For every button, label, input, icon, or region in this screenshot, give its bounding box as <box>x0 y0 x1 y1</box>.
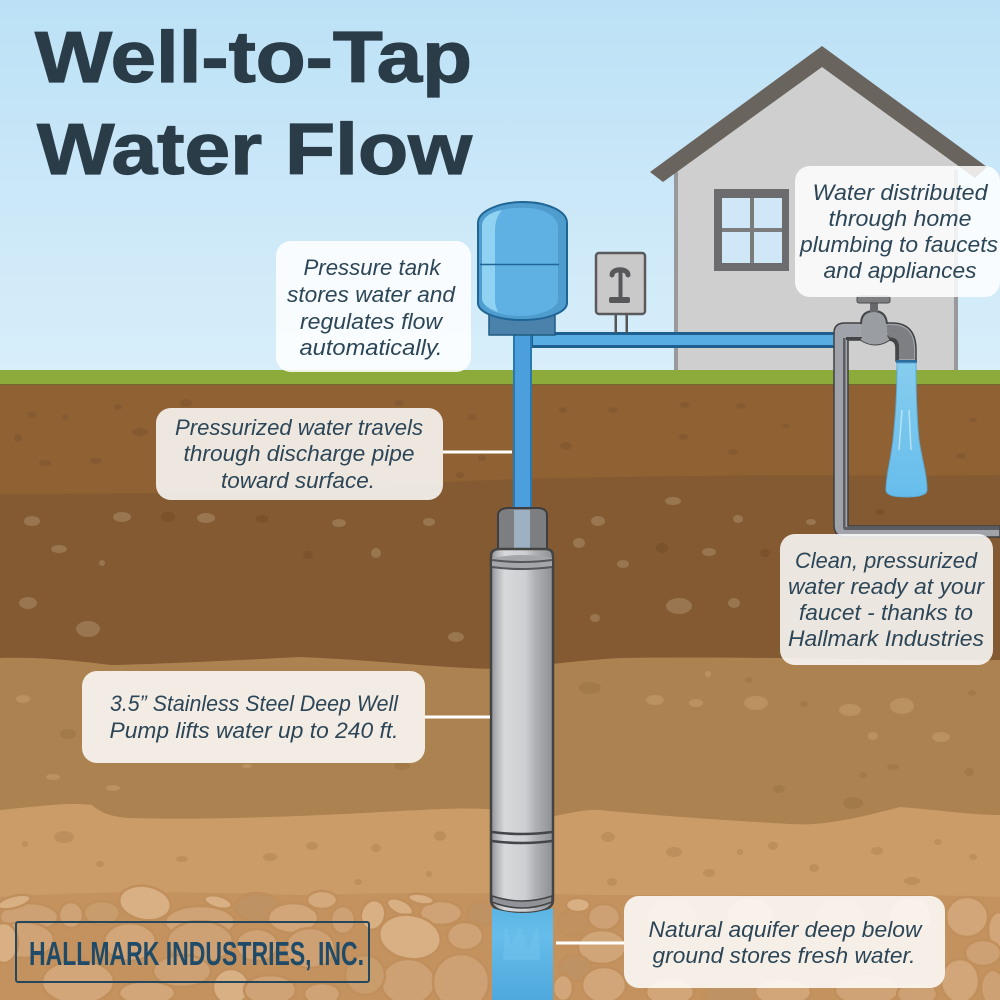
callout: clean water: Hallmark Industries <box>788 626 984 651</box>
house <box>650 46 987 370</box>
callout: home plumbing <box>795 166 1000 297</box>
callout: aquifer <box>624 896 945 988</box>
callout: discharge pipe: Pressurized water travels <box>175 415 423 440</box>
well casing connector <box>498 508 547 553</box>
sky <box>0 0 1000 372</box>
callout: clean water <box>780 534 993 665</box>
callout: aquifer: Natural aquifer deep below <box>648 917 923 942</box>
soil speckles: second layer <box>19 497 885 642</box>
callout: pressure tank: automatically. <box>300 335 442 360</box>
callout: discharge pipe <box>156 408 443 500</box>
callout: home plumbing: plumbing to faucets <box>799 232 998 257</box>
callout: pressure tank: regulates flow <box>300 309 444 334</box>
ground layers <box>0 370 1000 1000</box>
stainless pump <box>491 549 553 913</box>
callout: pressure tank: stores water and <box>287 282 456 307</box>
callout: home plumbing: through home <box>828 206 972 231</box>
callout: pump <box>82 671 425 763</box>
water stream from faucet <box>886 363 927 497</box>
title: Water Flow <box>37 110 473 190</box>
callout: pressure tank: Pressure tank <box>304 255 442 280</box>
callout: discharge pipe: toward surface. <box>221 468 375 493</box>
pressure switch <box>596 253 645 333</box>
soil speckles: third layer <box>16 671 976 809</box>
gravel aquifer rocks <box>0 882 1000 1000</box>
house window <box>714 189 789 271</box>
faucet and return pipe <box>834 296 1000 537</box>
title <box>35 18 473 190</box>
callout leader lines <box>425 452 624 943</box>
callout: aquifer: ground stores fresh water. <box>652 943 916 968</box>
pressure tank <box>478 202 567 335</box>
callout: clean water: water ready at your <box>788 574 986 599</box>
callout: home plumbing: Water distributed <box>812 180 989 205</box>
callout: clean water: Clean, pressurized <box>795 548 978 573</box>
callout: pressure tank <box>276 241 471 372</box>
callout: discharge pipe: through discharge pipe <box>184 441 414 466</box>
discharge pipe and house supply line <box>513 332 837 510</box>
callout: pump: 3.5” Stainless Steel Deep Well <box>110 691 399 716</box>
logo: Hallmark Industries: HALLMARK INDUSTRIES, INC. <box>29 935 364 972</box>
aquifer water <box>492 908 553 1000</box>
callout: home plumbing: and appliances <box>824 258 976 283</box>
callout: clean water: faucet - thanks to <box>799 600 973 625</box>
logo: Hallmark Industries <box>16 922 369 982</box>
title: Well-to-Tap <box>35 18 472 98</box>
callout: pump: Pump lifts water up to 240 ft. <box>110 718 398 743</box>
soil speckles: top layer <box>14 399 977 478</box>
soil speckles: fourth layer <box>22 831 977 886</box>
